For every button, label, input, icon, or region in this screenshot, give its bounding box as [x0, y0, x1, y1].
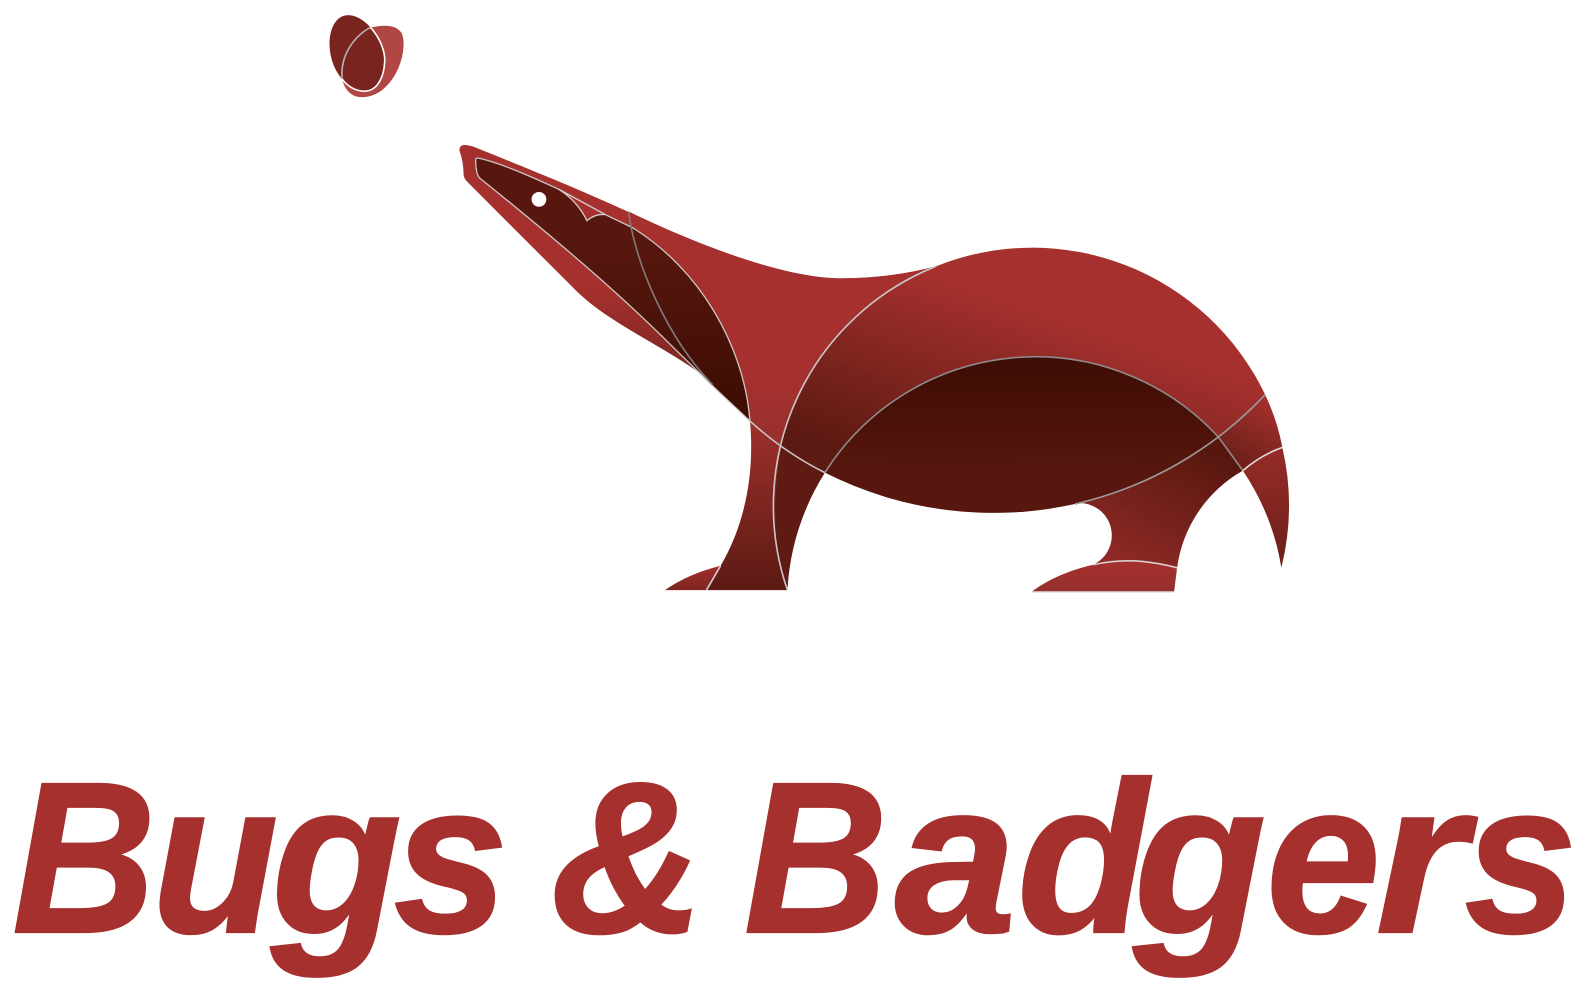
rear leg [1075, 437, 1243, 568]
title: Bugs & Badgers [12, 737, 1577, 978]
badger head [459, 145, 936, 446]
tail upper [1219, 395, 1282, 471]
title: Bugs & Badgers: r [1375, 737, 1478, 978]
badger illustration [459, 145, 1289, 592]
eye [532, 192, 546, 207]
dark belly [825, 357, 1219, 513]
icon: bug [330, 15, 404, 97]
ear [559, 189, 605, 221]
title: Bugs & Badgers: B [744, 737, 888, 978]
title: Bugs & Badgers: s [394, 737, 508, 978]
front leg [706, 421, 787, 590]
title: Bugs & Badgers: u [152, 737, 278, 978]
title: Bugs & Badgers: B [12, 737, 156, 978]
title: Bugs & Badgers: & [551, 737, 704, 978]
badger neck [629, 212, 936, 446]
badger body ring [774, 248, 1265, 588]
contour lines [629, 212, 1282, 592]
dark head mask [476, 158, 750, 421]
front foot [665, 566, 721, 590]
rear foot [1032, 561, 1177, 592]
title: Bugs & Badgers: a [895, 737, 1016, 978]
title: Bugs & Badgers: s [1465, 737, 1577, 978]
title: Bugs & Badgers: g [1133, 737, 1266, 978]
title: Bugs & Badgers: g [270, 737, 402, 978]
tail [1243, 447, 1289, 568]
title: Bugs & Badgers: d [1017, 737, 1152, 978]
title: Bugs & Badgers: e [1266, 737, 1381, 978]
